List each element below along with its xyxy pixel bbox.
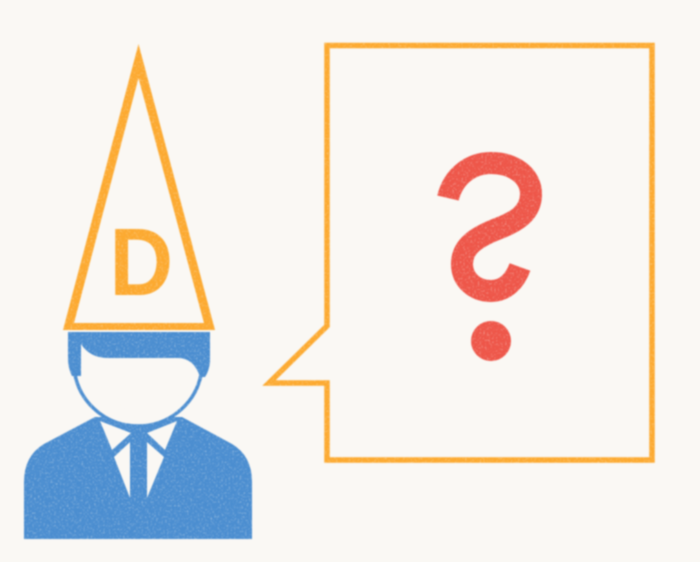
shirt collar and front — [100, 421, 177, 498]
question mark curve — [448, 163, 531, 291]
face stroke — [75, 375, 201, 426]
cap letter D: D — [109, 209, 173, 316]
question mark dot — [471, 321, 511, 361]
speech bubble — [269, 46, 652, 460]
cap outline — [63, 44, 215, 330]
dunce cap — [63, 44, 215, 330]
person: businessman — [24, 332, 252, 539]
question mark — [448, 163, 531, 361]
suit jacket — [24, 417, 252, 539]
face fill — [75, 375, 201, 426]
hair — [68, 332, 210, 377]
